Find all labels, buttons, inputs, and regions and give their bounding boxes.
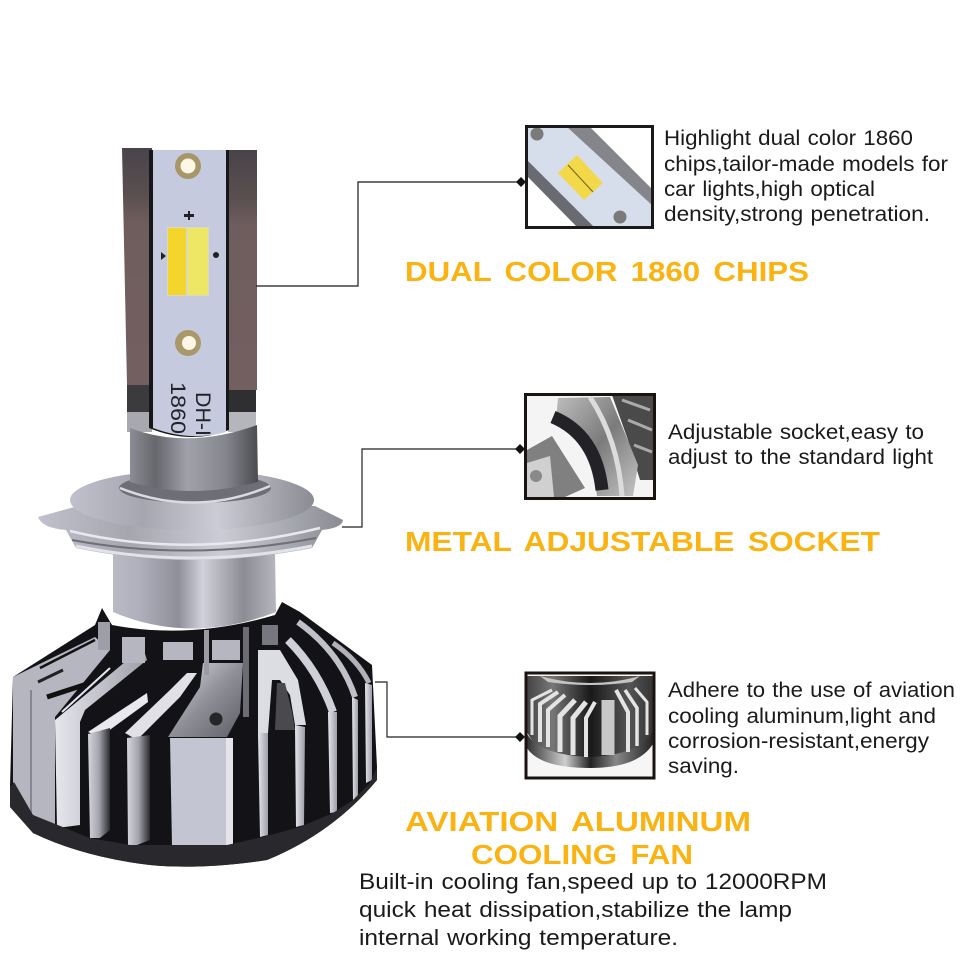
flange inner ring — [119, 473, 271, 503]
top screw — [175, 153, 201, 179]
product: LED headlight bulb — [10, 148, 377, 867]
board print: DH-I — [191, 392, 214, 436]
leader line: socket — [342, 444, 525, 527]
text: aluminum description: cooling aluminum,light and — [668, 704, 936, 728]
board print — [166, 382, 214, 436]
text: aluminum description: saving. — [668, 754, 739, 778]
text: aluminum description — [668, 678, 955, 778]
fan base ring — [10, 767, 377, 867]
cooling fan body — [10, 602, 377, 867]
fan screw — [210, 712, 222, 726]
LED circuit board — [149, 150, 229, 437]
thumbnail: socket close-up — [526, 394, 654, 498]
upper flange dome — [70, 470, 314, 530]
thumbnail: fan close-up — [526, 673, 654, 778]
board marks — [161, 211, 219, 260]
text: chips description — [664, 126, 948, 226]
lower screw — [175, 330, 201, 356]
heading: chips: DUAL COLOR 1860 CHIPS — [405, 256, 809, 287]
text: fan description — [359, 869, 827, 950]
fan left fin block — [13, 637, 147, 828]
thumbnail: chips close-up — [526, 126, 653, 228]
leader line: fan — [375, 682, 525, 742]
heading: aluminum fan — [405, 806, 751, 870]
text: aluminum description: corrosion-resistant,energy — [668, 729, 929, 753]
heading: aluminum fan: AVIATION ALUMINUM — [405, 806, 751, 837]
thumbnail fins — [532, 688, 647, 757]
text: fan description: internal working temperature. — [359, 925, 678, 950]
text: fan description: quick heat dissipation,stabilize the lamp — [359, 897, 792, 922]
fin top tabs — [98, 622, 278, 717]
text: aluminum description: Adhere to the use of aviation — [668, 678, 955, 702]
lower flange — [38, 506, 343, 560]
text: socket description: adjust to the standard light — [668, 445, 933, 469]
text: chips description: chips,tailor-made models for — [664, 152, 948, 176]
bulb neck — [130, 425, 258, 491]
heading: socket: METAL ADJUSTABLE SOCKET — [405, 526, 880, 557]
text: chips description: Highlight dual color 1860 — [664, 126, 913, 150]
lower cylinder — [113, 552, 276, 628]
text: socket description: Adjustable socket,easy to — [668, 420, 924, 444]
leader line: chips — [256, 177, 526, 286]
heading: aluminum fan: COOLING FAN — [471, 839, 693, 870]
bulb heatsink strips — [122, 148, 257, 432]
thumbnail chip — [558, 155, 603, 200]
text: chips description: density,strong penetration. — [664, 202, 930, 226]
text: chips description: car lights,high optical — [664, 177, 875, 201]
chip pair — [167, 227, 209, 296]
fan fins — [88, 663, 372, 846]
board print: 1860 — [166, 382, 189, 434]
fin shoulders — [258, 622, 369, 733]
text: fan description: Built-in cooling fan,speed up to 12000RPM — [359, 869, 827, 894]
text: socket description — [668, 420, 933, 469]
